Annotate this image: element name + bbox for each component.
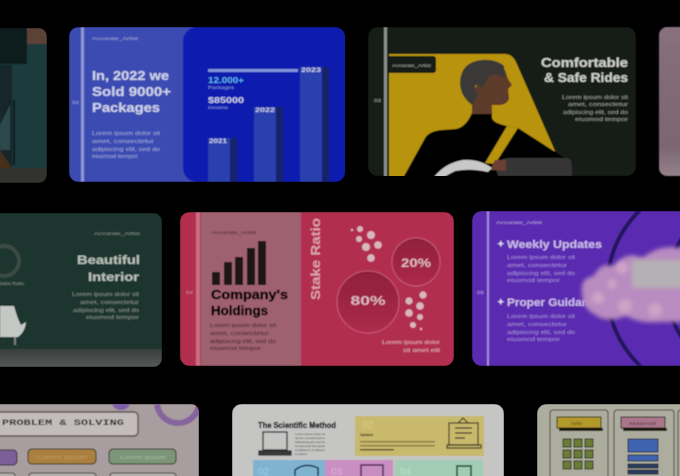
panel: beautiful interior slide	[0, 213, 162, 367]
text block: lorem: Lorem ipsum dolor sit	[92, 131, 161, 137]
stat: income: $85000	[208, 96, 245, 105]
stat: packages: Packages	[208, 85, 235, 90]
text block: lorem	[210, 323, 277, 352]
text block: lorem: Lorem ipsum dolor sit	[72, 292, 140, 298]
bar chart	[208, 67, 329, 182]
heading: sold packages: Packages	[92, 101, 160, 115]
text block: method: incididunt ut labore	[295, 448, 325, 452]
text block: method	[295, 432, 325, 456]
bar chart: 2021	[209, 138, 228, 145]
heading: proper guidance: ✦	[497, 297, 505, 307]
title box: PROBLEM & SOLVING	[2, 419, 124, 428]
card: menu	[550, 410, 608, 476]
panel: experiment: Experiment	[360, 432, 373, 437]
card: menu: Skills	[571, 421, 583, 426]
text block: lorem: adipiscing elit, sed do	[73, 308, 139, 314]
illustration: driver	[403, 60, 572, 178]
text block: lorem	[72, 292, 140, 321]
text block: lorem: Lorem ipsum dolor sit	[507, 314, 576, 320]
heading: comfortable rides: Comfortable	[541, 56, 628, 70]
chart panel	[183, 27, 353, 182]
text block: lorem: eiusmod tempor	[92, 154, 138, 160]
icon: keypad	[563, 439, 593, 469]
text block: method: et dolore	[295, 452, 307, 456]
heading: comfortable rides: & Safe Rides	[544, 71, 628, 85]
text block: lorem: eiusmod tempor	[507, 337, 560, 343]
panel: green step	[395, 460, 483, 476]
heading: proper guidance: Proper Guidance	[507, 297, 602, 309]
text block: lorem: amet, consectetur	[507, 263, 567, 269]
label: artist: Accurate_Artist	[496, 220, 543, 226]
icon: laptop	[259, 432, 291, 455]
heading: beautiful interior: Beautiful	[77, 253, 140, 267]
text block: lorem: eiusmod tempor	[86, 315, 139, 321]
card: cropped right	[678, 410, 680, 476]
panel: problem and solving slide	[0, 381, 199, 476]
chart: growth bars	[212, 241, 266, 285]
text block: caption: Lorem ipsum dolor	[382, 340, 440, 346]
heading: company holdings: Company's	[211, 288, 288, 302]
button: orange	[28, 449, 96, 464]
text block: caption	[382, 340, 441, 354]
panel: experiment: 02	[362, 420, 374, 431]
heading: beautiful interior: Interior	[88, 270, 139, 284]
card: material	[614, 410, 674, 476]
panel: weekly updates slide	[472, 211, 680, 366]
panel: scientific method slide	[232, 404, 504, 476]
decorative ring	[607, 211, 644, 366]
heading: weekly updates: ✦	[497, 239, 505, 249]
text block: lorem: adipiscing elit, sed do	[563, 110, 628, 116]
text block: lorem: amet, consectetur	[507, 322, 567, 328]
panel: photo slide cropped left	[0, 28, 47, 183]
panel: blue step	[253, 460, 325, 476]
text block: lorem	[507, 314, 576, 343]
illustration: yellow window	[389, 54, 555, 178]
text block: lorem	[562, 95, 629, 123]
panel: mauve slide cropped right	[659, 27, 680, 176]
button: green	[109, 449, 176, 464]
text block: method: eiusmod tempor	[295, 444, 325, 448]
chart: 20% circle	[392, 238, 440, 286]
text block: lorem: Lorem ipsum dolor sit	[562, 95, 629, 101]
panel: experiment	[355, 416, 484, 456]
text block: lorem: amet, consectetur	[210, 331, 269, 337]
button: orange: Lorem ipsum	[37, 455, 87, 461]
stat: income: Income	[208, 105, 229, 110]
text block: lorem	[507, 255, 576, 284]
label: artist tag	[387, 56, 436, 73]
text block: lorem: eiusmod tempor	[210, 346, 261, 352]
text block: lorem: amet, consectetur	[92, 139, 154, 145]
text block: lorem: Lorem ipsum dolor sit	[210, 323, 277, 329]
panel: company holdings slide	[180, 212, 454, 366]
label: page number: 03	[374, 98, 382, 103]
button: purple	[0, 450, 17, 465]
text block: method: Lorem ipsum dolor sit	[295, 432, 325, 436]
chart: 80% circle: 80%	[350, 294, 386, 308]
icon: cloud	[582, 247, 680, 322]
heading: sold packages: In, 2022 we	[92, 69, 169, 83]
label: page number: 05	[477, 290, 485, 295]
heading: sold packages: Sold 9000+	[92, 85, 171, 99]
text block: lorem: amet, consectetur	[568, 102, 628, 108]
panel: keypad slide	[537, 404, 680, 476]
heading: stake ratio: Stake Ratio	[309, 218, 323, 300]
card: material: Material	[629, 421, 656, 426]
text block: lorem: adipiscing elit, sed do	[507, 330, 575, 336]
heading: company holdings: Holdings	[211, 304, 268, 318]
label: page number: 04	[186, 290, 194, 295]
icon: stacked bars	[628, 439, 658, 474]
label: artist: Accurate_Artist	[94, 231, 141, 236]
stat: packages: 12.000+	[208, 76, 244, 85]
text block: method: adipiscing elit sed do	[295, 440, 325, 444]
chart: 80% circle	[337, 271, 399, 333]
icon: white armchair	[0, 306, 26, 337]
text block: caption: sit amet elit	[403, 348, 441, 354]
label: artist: Accurate_Artist	[92, 36, 139, 41]
label: artist: Accurate_Artist	[211, 230, 257, 236]
bar chart: 2022	[255, 107, 276, 114]
icon: bottom dots	[405, 291, 427, 330]
stat: packages	[208, 76, 244, 90]
heading: weekly updates: Weekly Updates	[507, 239, 602, 251]
label: page number: 02	[72, 100, 80, 105]
text block: lorem: eiusmod tempor	[507, 278, 560, 284]
chart: 20% circle: 20%	[401, 256, 431, 270]
panel: 2022 packages slide	[69, 27, 353, 182]
label: artist tag: Accurate_Artist	[392, 63, 432, 68]
panel: comfortable rides slide	[368, 27, 636, 178]
stat: income	[208, 96, 245, 110]
panel: pink step	[325, 460, 393, 476]
decorative purple rings	[111, 381, 199, 423]
icon: top dots	[351, 226, 382, 262]
chart: ring	[0, 246, 19, 276]
text block: method: amet consectetur	[295, 436, 325, 440]
text block: lorem: adipiscing elit, sed do	[507, 271, 575, 277]
title box	[0, 412, 138, 436]
bar chart: 2023	[301, 67, 322, 74]
text block: lorem: eiusmod tempor	[575, 117, 628, 123]
title: The Scientific Method	[258, 420, 336, 430]
text block: lorem: Lorem ipsum dolor sit	[507, 255, 576, 261]
button: green: Lorem ipsum	[120, 455, 166, 461]
text block: lorem: amet, consectetur	[80, 300, 139, 306]
lower boxes	[0, 473, 176, 476]
text block: lorem: adipiscing elit, sed do	[92, 147, 160, 153]
icon: board	[447, 418, 481, 448]
text block: lorem: adipiscing elit, sed do	[210, 339, 276, 345]
